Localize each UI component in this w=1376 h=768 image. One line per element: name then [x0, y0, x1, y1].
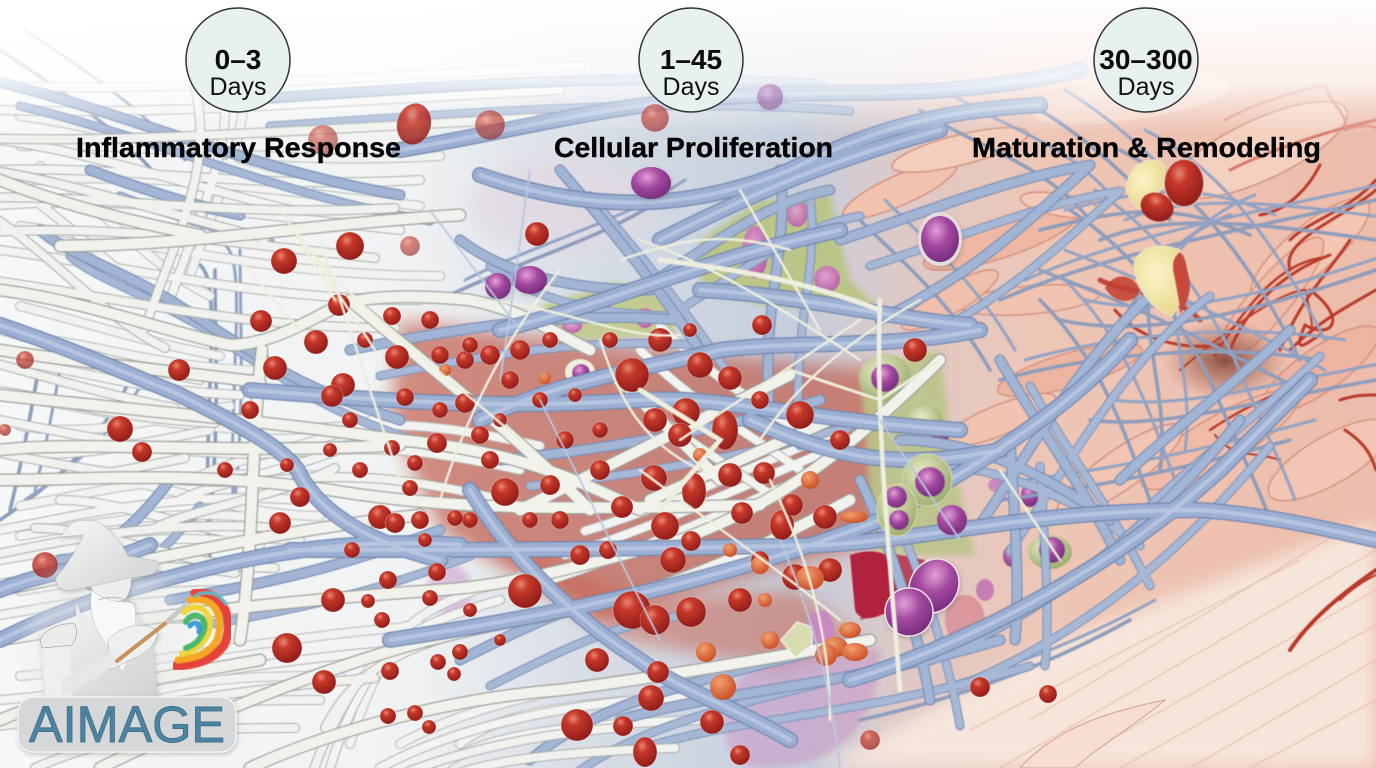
badge: 1-45 days: Days — [663, 73, 719, 101]
badge: 30-300 days: Days — [1118, 73, 1174, 101]
top fade — [0, 0, 1376, 135]
badge: 1-45 days: 1–45 — [660, 44, 722, 75]
badge: 1-45 days — [639, 8, 743, 112]
icon: wizard figure — [40, 520, 158, 697]
badge: 30-300 days — [1094, 8, 1198, 112]
heading: cellular proliferation: Cellular Proliferation — [554, 132, 833, 163]
underlay: cell bed in the wound centre — [390, 160, 975, 768]
stage 3: maturation and remodeling — [972, 8, 1321, 163]
heading: inflammatory response: Inflammatory Response — [76, 132, 401, 163]
cells: red blood cells — [0, 99, 1057, 767]
badge: 0-3 days — [186, 8, 290, 112]
badge: 0-3 days: Days — [210, 73, 266, 101]
spindle cell bottom right — [1020, 700, 1165, 768]
heading: maturation and remodeling: Maturation & Remodeling — [972, 132, 1321, 163]
stage 2: cellular proliferation — [554, 8, 833, 163]
badge: 30-300 days: 30–300 — [1099, 44, 1193, 75]
cells: large purple and green cells over fibers — [485, 84, 969, 658]
cluster: macrophage and fibroblast cells — [562, 199, 1072, 650]
fibers: thin strands over the cells — [240, 170, 1060, 768]
logo: glow backing — [27, 555, 183, 725]
blood vessels — [1100, 85, 1376, 650]
icon: paint brush — [117, 597, 195, 661]
logo: AIMAGE wizard — [18, 520, 236, 753]
icon: rainbow swirl — [176, 593, 228, 666]
panel: muscle tissue right — [820, 66, 1376, 768]
cells: orange granules — [439, 364, 868, 700]
logo: badge: AIMAGE — [29, 696, 225, 753]
stage 1: inflammatory response — [76, 8, 401, 163]
badge: 0-3 days: 0–3 — [215, 44, 261, 75]
cells: yellow crescents and red cells right — [1105, 159, 1204, 316]
